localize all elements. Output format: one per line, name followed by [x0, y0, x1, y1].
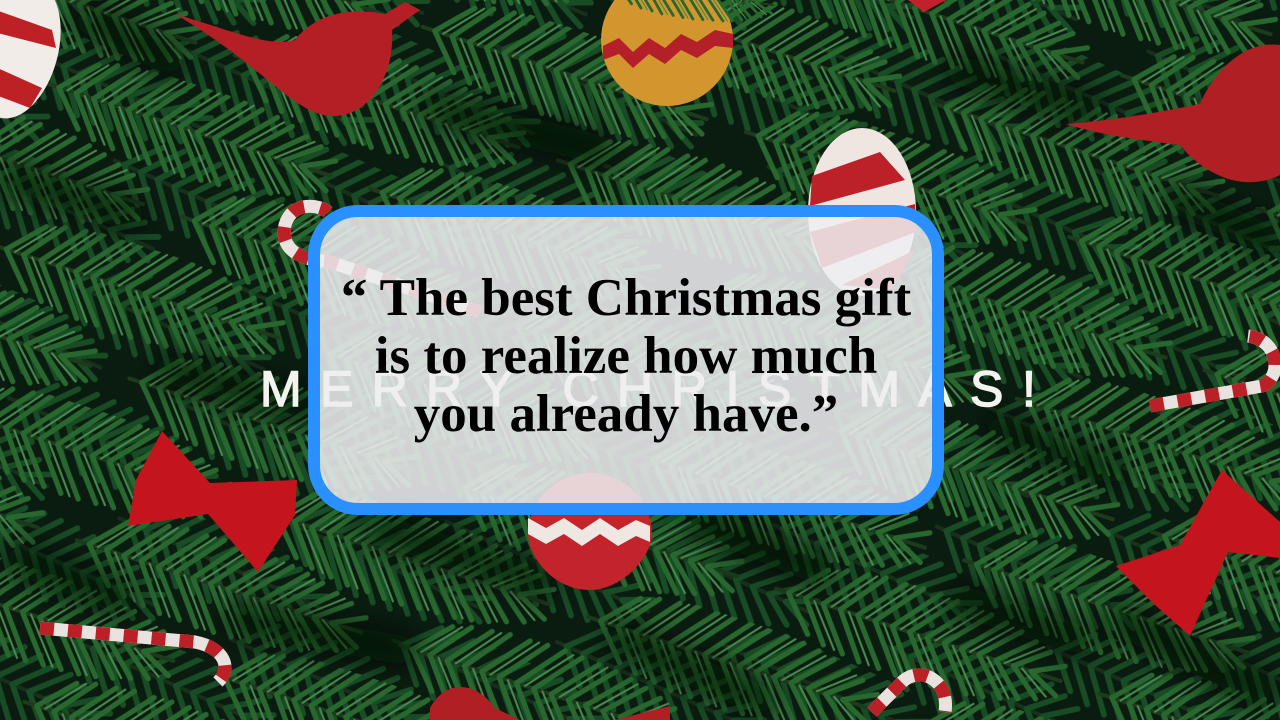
- greeting text: MERRY CHRISTMAS: [260, 361, 1022, 417]
- ornament: candy cane bottom: [872, 675, 946, 712]
- quote text: [341, 269, 911, 443]
- ornament: red bird top right: [1066, 44, 1280, 182]
- ornament: red ball bottom: [528, 473, 652, 590]
- greeting text: !: [1022, 361, 1054, 417]
- quote text: “ The best Christmas gift: [341, 269, 911, 327]
- ornament: red bird top left: [175, 2, 420, 116]
- ornament: candy cane right: [1150, 336, 1275, 406]
- ornament: striped ball centre: [808, 128, 916, 296]
- quote text: is to realize how much: [375, 327, 877, 385]
- ornament: small red shape top: [908, 0, 946, 12]
- ornament: striped ball top left: [0, 0, 75, 128]
- branch overlapping gold ball: [607, 0, 776, 30]
- ornament: bird bottom: [430, 687, 670, 720]
- quote panel: [308, 205, 944, 515]
- ornament: candy cane left: [284, 206, 480, 312]
- ornament: red bow right: [1116, 470, 1280, 636]
- ornament: red bow left: [128, 431, 297, 572]
- ornament: gold ball: [601, 0, 733, 106]
- quote text: you already have.”: [414, 385, 838, 443]
- ornament: candy cane bottom left: [40, 628, 225, 682]
